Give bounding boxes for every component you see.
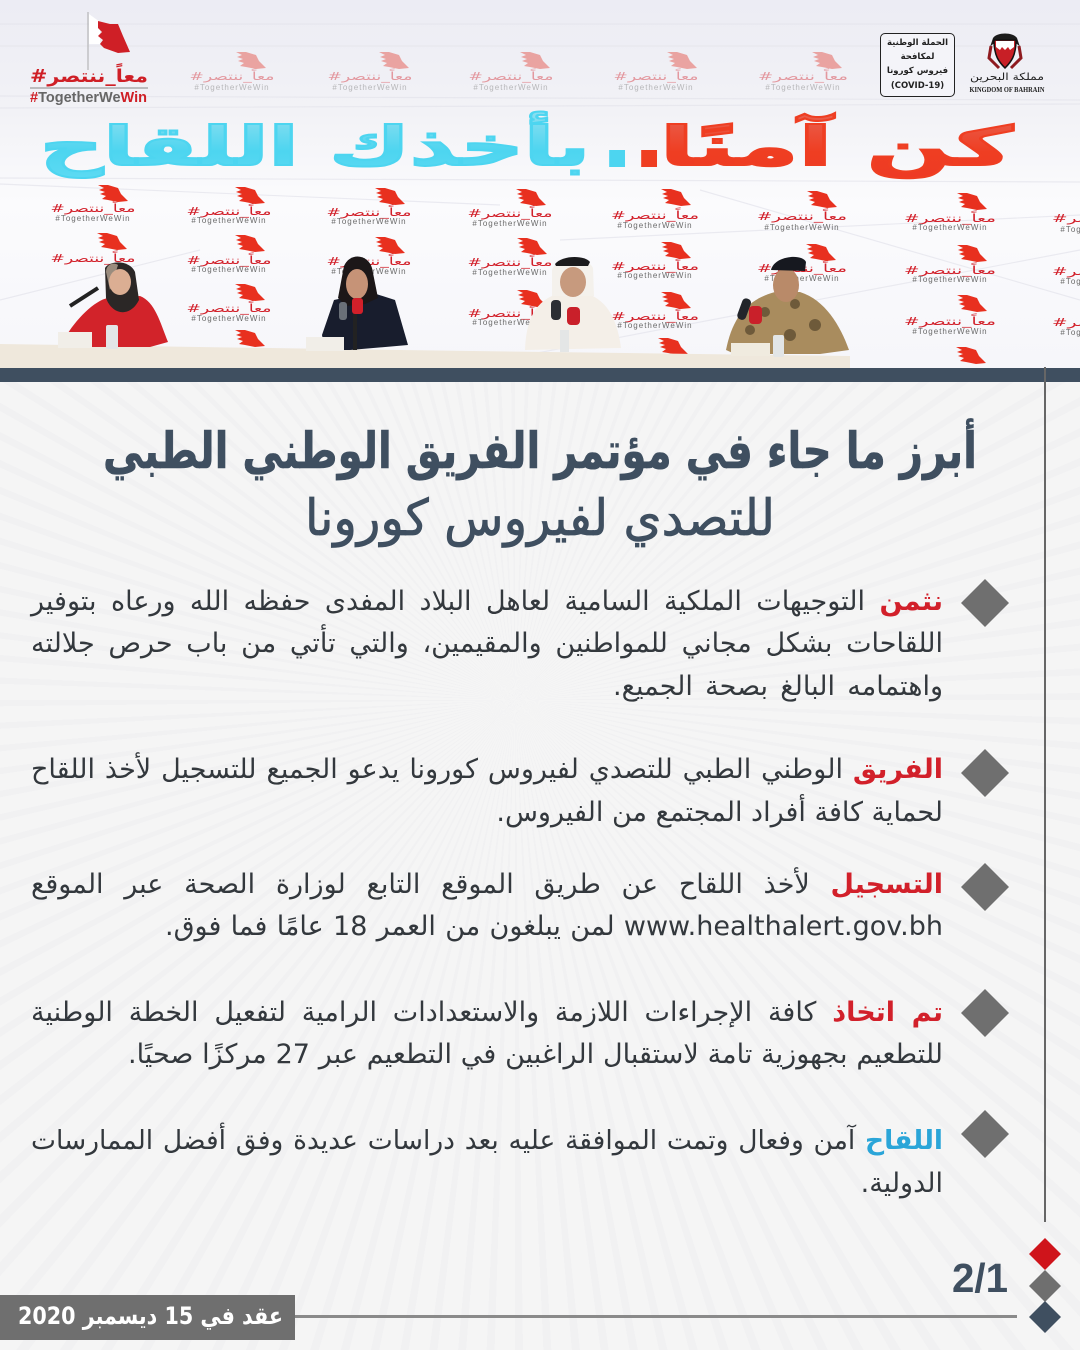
Kingdom of Bahrain emblem [970, 34, 1044, 94]
presenter 1: woman in red [58, 262, 168, 349]
bullet diamond 4 [961, 989, 1009, 1037]
backdrop logo row 1: #TogetherWeWin [194, 83, 270, 92]
photo header: press conference [0, 0, 1080, 368]
national campaign badge: لمكافحة [901, 52, 934, 62]
paragraph 3: registration [31, 867, 943, 942]
footer rule [295, 1315, 1017, 1318]
backdrop logo row 1: #معاً_ننتصر [468, 68, 554, 83]
paragraph 4: preparations [31, 997, 943, 1070]
backdrop logo rows 2 to 4: #TogetherWeWin [617, 221, 693, 230]
backdrop logo row 1: #معاً_ننتصر [190, 68, 275, 83]
backdrop logo rows 2 to 4: #معاً_ننتصر [611, 308, 699, 323]
presenter 4: officer in camouflage [726, 257, 849, 357]
vertical rule [1044, 367, 1046, 1222]
campaign logo: TogetherWeWin: #معاً_ننتصر [30, 63, 148, 87]
bullet diamond 1 [961, 579, 1009, 627]
Kingdom of Bahrain emblem: مملكة البحرين [970, 72, 1044, 83]
backdrop logo rows 2 to 4: #TogetherWeWin [912, 327, 988, 336]
backdrop logo rows 2 to 4: #TogetherWeWin [191, 314, 267, 323]
backdrop logo row 1: #معاً_ننتصر [614, 68, 699, 83]
backdrop logo row 1: #TogetherWeWin [618, 83, 694, 92]
national campaign badge: (COVID-19) [891, 81, 944, 91]
backdrop logo rows 2 to 4: #معاً_ننتصر [50, 200, 136, 215]
backdrop logo rows 2 to 4: #معاً_ننتصر [326, 204, 412, 219]
backdrop logo row 1: #معاً_ننتصر [758, 68, 848, 83]
banner slogan red: كن آمنًا [660, 113, 1014, 178]
backdrop logo rows 2 to 4: #TogetherWeWin [912, 275, 988, 284]
backdrop logo rows 2 to 4: #TogetherWeWin [764, 274, 840, 283]
banner dot cyan: . [600, 84, 634, 189]
paragraph 2: medical team: الفريق الوطني الطبي للتصدي لفيروس كورونا يدعو الجميع للتسجيل لأخذ اللقاح [31, 754, 943, 785]
backdrop logo rows 2 to 4: #معاً_ننتصر [904, 262, 996, 277]
paragraph 5: vaccine safety: اللقاح آمن وفعال وتمت الموافقة عليه بعد دراسات عديدة وفق أفضل الممارسات [31, 1125, 943, 1156]
backdrop logo rows 2 to 4: #TogetherWeWin [617, 271, 693, 280]
backdrop logo rows 2 to 4: #معاً_ننتصر [186, 203, 272, 218]
paragraph 2: medical team: لحماية كافة أفراد المجتمع من الفيروس. [496, 797, 943, 828]
paragraph 5: vaccine safety: الدولية. [861, 1168, 943, 1199]
backdrop logo rows 2 to 4: #معاً_ننتصر [757, 260, 847, 275]
paragraph 1: directives: واهتمامه البالغ بصحة الجميع. [613, 671, 943, 702]
national campaign badge [880, 33, 955, 97]
backdrop logo rows 2 to 4: #معاً_ننتصر [468, 305, 553, 320]
paragraph 1: directives [30, 586, 943, 702]
paragraph 4: preparations: للتطعيم بجهوزية تامة لاستقبال الراغبين في التطعيم عبر 27 مركزًا صحيًا. [128, 1039, 943, 1070]
campaign logo: TogetherWeWin [30, 12, 148, 106]
paragraph 4: preparations: تم اتخاذ كافة الإجراءات اللازمة والاستعدادات الرامية لتفعيل الخطة الوطنية [31, 997, 943, 1028]
date box: عقد في 15 ديسمبر 2020 [18, 1302, 283, 1330]
backdrop logo rows 2 to 4: #TogetherWeWin [331, 267, 407, 276]
footer diamond navy [1029, 1301, 1061, 1333]
backdrop logo row 1: #TogetherWeWin [473, 83, 549, 92]
backdrop logo rows 2 to 4: #معاً_ننتصر [50, 250, 136, 265]
backdrop logo rows 2 to 4: #معاً_ننتصر [904, 210, 996, 225]
title line 2: للتصدي لفيروس كورونا [305, 489, 775, 548]
presenter 2: woman in navy blazer [306, 256, 408, 351]
backdrop logo rows 2 to 4: #TogetherWeWin [331, 217, 407, 226]
backdrop logo rows 2 to 4: #معاً_ننتصر [468, 254, 553, 269]
footer diamond grey [1029, 1270, 1061, 1302]
backdrop logo rows 2 to 4: #TogetherWeWin [191, 216, 267, 225]
paragraph 1: directives: نثمن التوجيهات الملكية السامية لعاهل البلاد المفدى حفظه الله ورعاه بتوفير [31, 586, 943, 617]
backdrop logo rows 2 to 4: #TogetherWeWin [617, 321, 693, 330]
paragraph 2: medical team [31, 752, 943, 828]
backdrop logo rows 2 to 4: #TogetherWeWin [191, 265, 267, 274]
ray background [0, 382, 1080, 1350]
Kingdom of Bahrain emblem: KINGDOM OF BAHRAIN [970, 86, 1044, 94]
backdrop logo rows 2 to 4: #معاً_ننتصر [904, 313, 996, 328]
banner dot red: . [632, 84, 666, 189]
backdrop logo rows 2 to 4: #معاً_ننتصر [186, 252, 272, 267]
backdrop logo rows 2 to 4 [50, 185, 1080, 364]
backdrop logo rows 2 to 4: #معاً_ننتصر [186, 300, 272, 315]
backdrop logo rows 2 to 4: #TogetherWeWin [472, 219, 548, 228]
backdrop logo rows 2 to 4: #TogetherWeWin [55, 214, 131, 223]
backdrop logo rows 2 to 4: #TogetherWeWin [472, 268, 548, 277]
backdrop logo rows 2 to 4: #معاً_ننتصر [757, 208, 847, 223]
paragraph 3: registration: التسجيل لأخذ اللقاح عن طريق الموقع التابع لوزارة الصحة عبر الموقع [31, 869, 943, 900]
backdrop logo rows 2 to 4: #معاً_ننتصر [611, 207, 699, 222]
campaign logo: TogetherWeWin: #TogetherWeWin [30, 90, 147, 106]
national campaign badge: الحملة الوطنية [887, 38, 948, 48]
backdrop logo row 1: #معاً_ننتصر [328, 68, 413, 83]
national campaign badge: فيروس كورونا [887, 66, 948, 76]
backdrop logo rows 2 to 4: #TogetherWeWin [912, 223, 988, 232]
backdrop logo rows 2 to 4: #TogetherWeWin [764, 223, 840, 232]
bullet diamond 2 [961, 749, 1009, 797]
presenter 3: man in white thobe [525, 257, 621, 352]
date box [0, 1295, 295, 1340]
main title [103, 418, 977, 548]
backdrop logo row 1 [190, 52, 848, 92]
bullet diamond 5 [961, 1110, 1009, 1158]
backdrop logo row 1: #TogetherWeWin [765, 83, 841, 92]
paragraph 3: registration: www.healthalert.gov.bh لمن يبلغون من العمر 18 عامًا فما فوق. [165, 911, 943, 942]
dark separator band [0, 368, 1080, 382]
footer diamond red [1029, 1238, 1061, 1270]
backdrop logo rows 2 to 4: #TogetherWeWin [472, 318, 548, 327]
page number: 2/1 [952, 1255, 1008, 1301]
bullet diamond 3 [961, 863, 1009, 911]
backdrop logo row 1: #TogetherWeWin [332, 83, 408, 92]
backdrop logo rows 2 to 4: #معاً_ننتصر [326, 253, 412, 268]
backdrop logo rows 2 to 4: #معاً_ننتصر [468, 205, 553, 220]
paragraph 1: directives: اللقاحات بشكل مجاني للمواطنين والمقيمين، والتي تأتي من باب حرص جلالته [31, 628, 943, 659]
banner slogan cyan: بأخذك اللقاح [40, 111, 590, 178]
backdrop logo rows 2 to 4: #معاً_ننتصر [611, 258, 699, 273]
presenter table [0, 344, 850, 368]
